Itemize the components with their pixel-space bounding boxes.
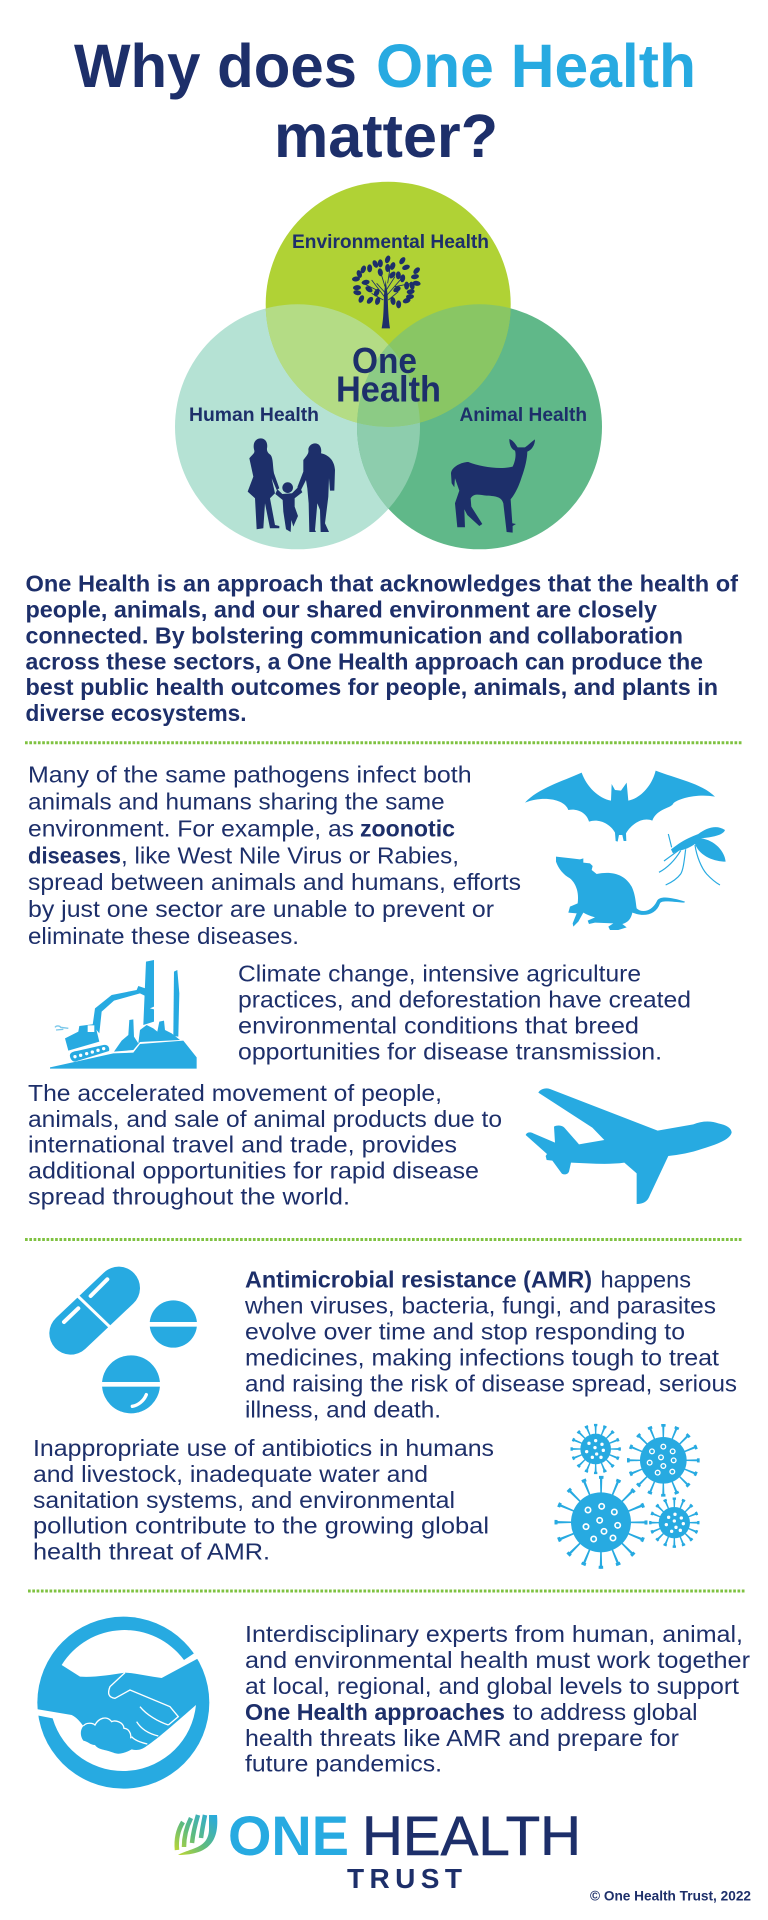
label: human health: Human Health — [189, 404, 319, 426]
icon: large virus — [556, 1477, 646, 1567]
text: interdisciplinary experts: health threats like AMR and prepare for — [245, 1725, 679, 1751]
label: one health: One — [352, 340, 417, 381]
text: zoonotic diseases — [28, 761, 521, 949]
text: inappropriate antibiotic use — [33, 1435, 494, 1564]
text: climate and agriculture: Climate change, intensive agriculture — [238, 961, 641, 987]
icon: tablet — [148, 1300, 198, 1348]
icon: pills — [64, 1279, 198, 1413]
icon: upper left virus — [572, 1425, 620, 1473]
intro paragraph: diverse ecosystems. — [26, 700, 246, 726]
text: climate and agriculture: practices, and deforestation have created — [238, 986, 691, 1012]
text: travel and trade — [28, 1080, 502, 1209]
text: antimicrobial resistance: happens — [600, 1267, 691, 1293]
text: climate and agriculture: opportunities for disease transmission. — [238, 1038, 662, 1064]
title: matter? — [274, 102, 498, 170]
intro paragraph: people, animals, and our shared environment are closely — [26, 597, 657, 623]
icon: upper right virus — [628, 1425, 698, 1495]
text: travel and trade: animals, and sale of animal products due to — [28, 1106, 502, 1132]
text: zoonotic diseases: spread between animals and humans, efforts — [28, 869, 521, 895]
text: antimicrobial resistance: medicines, making infections tough to treat — [245, 1344, 719, 1370]
logo: One Health Trust: TRUST — [347, 1863, 462, 1894]
text: travel and trade: additional opportunities for rapid disease — [28, 1158, 479, 1184]
text: interdisciplinary experts: One Health approaches — [245, 1699, 505, 1725]
icon: rat — [556, 857, 685, 930]
venn diagram: One Health — [175, 182, 602, 549]
text: antimicrobial resistance: when viruses, bacteria, fungi, and parasites — [244, 1293, 716, 1319]
intro paragraph: One Health is an approach that acknowledges that the health of — [26, 571, 738, 597]
text: travel and trade: international travel and trade, provides — [28, 1132, 457, 1158]
text: inappropriate antibiotic use: and livestock, inadequate water and — [33, 1461, 428, 1487]
text: inappropriate antibiotic use: Inappropriate use of antibiotics in humans — [33, 1435, 494, 1461]
intro paragraph — [26, 571, 738, 726]
label: animal health: Animal Health — [460, 404, 587, 426]
icon: bat, rat and mosquito — [525, 771, 726, 930]
icon: bat — [525, 771, 715, 842]
icon: logo leaf — [177, 1815, 217, 1855]
intro paragraph: across these sectors, a One Health approach can produce the — [26, 648, 703, 674]
icon: mosquito — [659, 827, 726, 885]
logo: One Health Trust: ONE — [228, 1804, 349, 1867]
text: zoonotic diseases: by just one sector are unable to prevent or — [28, 896, 494, 922]
icon: excavator deforestation — [50, 960, 197, 1069]
icon: family — [248, 438, 335, 532]
text: zoonotic diseases: animals and humans sharing the same — [28, 788, 445, 814]
text: zoonotic diseases: , like West Nile Virus or Rabies, — [121, 842, 459, 868]
text: inappropriate antibiotic use: sanitation systems, and environmental — [33, 1487, 455, 1513]
text: travel and trade: The accelerated movement of people, — [28, 1080, 442, 1106]
icon: viruses — [556, 1425, 698, 1567]
text: climate and agriculture: environmental conditions that breed — [238, 1012, 639, 1038]
label: one health — [336, 340, 441, 410]
text: inappropriate antibiotic use: pollution contribute to the growing global — [33, 1513, 489, 1539]
text: interdisciplinary experts: and environmental health must work together — [245, 1647, 750, 1673]
text: zoonotic diseases: environment. For example, as — [28, 815, 354, 841]
text: antimicrobial resistance: and raising the risk of disease spread, serious — [245, 1370, 737, 1396]
text: antimicrobial resistance: evolve over time and stop responding to — [245, 1319, 685, 1345]
copyright: © One Health Trust, 2022 — [590, 1888, 751, 1904]
label: environmental health: Environmental Health — [292, 231, 489, 253]
intro paragraph: connected. By bolstering communication and collaboration — [26, 623, 683, 649]
icon: lower right virus — [650, 1499, 698, 1547]
text: inappropriate antibiotic use: health threat of AMR. — [33, 1538, 270, 1564]
text: zoonotic diseases: Many of the same pathogens infect both — [28, 761, 472, 787]
intro paragraph: best public health outcomes for people, animals, and plants in — [26, 674, 718, 700]
text: antimicrobial resistance — [244, 1267, 737, 1422]
text: zoonotic diseases: diseases — [28, 842, 121, 868]
text: interdisciplinary experts: future pandemics. — [245, 1751, 442, 1777]
title: Why does — [74, 32, 357, 100]
icon: airplane — [526, 1088, 732, 1204]
text: antimicrobial resistance: Antimicrobial resistance (AMR) — [245, 1267, 592, 1293]
text: interdisciplinary experts: at local, regional, and global levels to support — [245, 1673, 739, 1699]
text: travel and trade: spread throughout the world. — [28, 1183, 350, 1209]
icon: tablet with highlight — [101, 1355, 161, 1413]
logo: One Health Trust: HEALTH — [362, 1804, 581, 1867]
logo: One Health Trust — [177, 1804, 581, 1894]
text: interdisciplinary experts: Interdisciplinary experts from human, animal, — [245, 1621, 743, 1647]
title: One Health — [376, 32, 696, 100]
text: climate and agriculture — [238, 961, 691, 1064]
text: antimicrobial resistance: illness, and death. — [245, 1396, 441, 1422]
text: zoonotic diseases: eliminate these diseases. — [28, 923, 299, 949]
text: zoonotic diseases: zoonotic — [360, 815, 455, 841]
icon: capsule — [64, 1279, 119, 1333]
icon: deer — [451, 439, 535, 533]
title — [74, 32, 696, 170]
label: one health: Health — [336, 369, 441, 410]
icon: handshake — [36, 1617, 209, 1789]
icon: tree — [352, 255, 421, 328]
text: interdisciplinary experts: to address global — [513, 1699, 698, 1725]
text: interdisciplinary experts — [245, 1621, 750, 1777]
